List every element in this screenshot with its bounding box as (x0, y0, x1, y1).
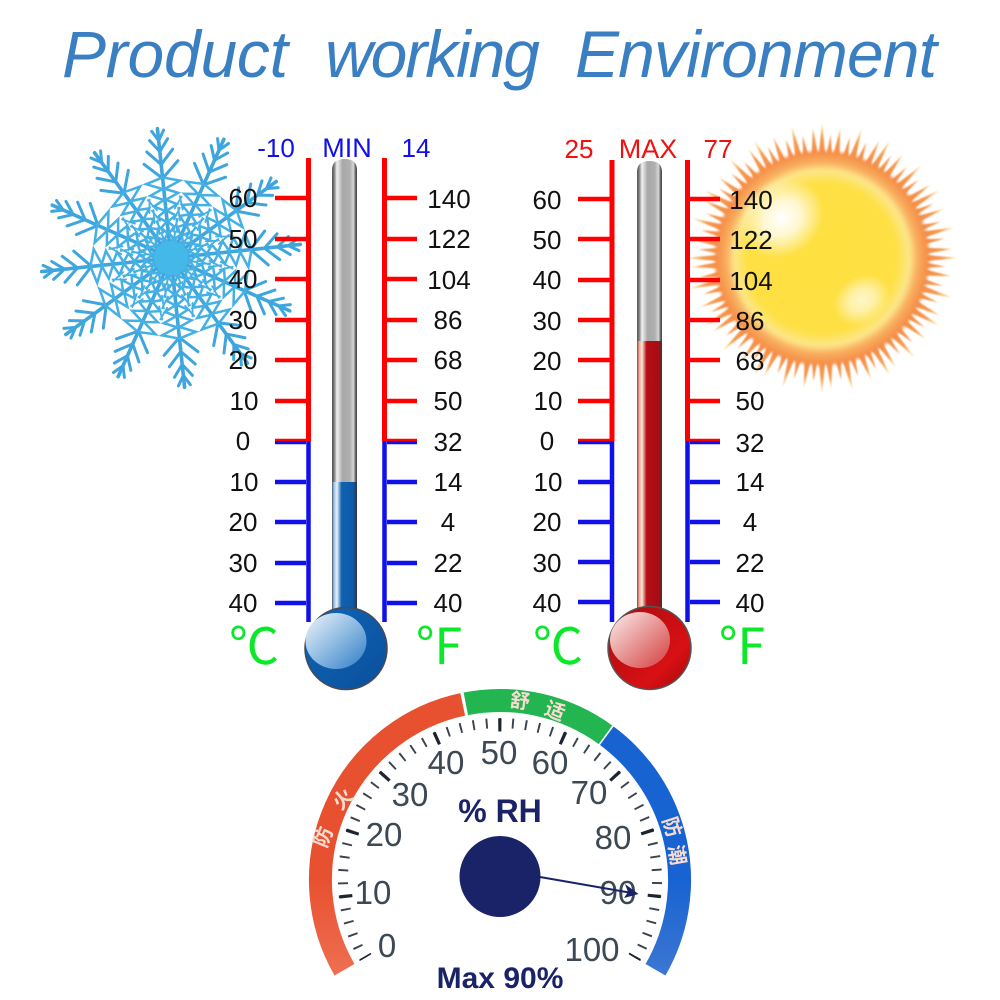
min celsius numbers: 30 (229, 548, 257, 578)
max fahrenheit numbers: 50 (736, 386, 764, 416)
min celsius numbers: 60 (229, 183, 257, 213)
max celsius numbers: 10 (534, 467, 562, 497)
band labels: 防 (657, 813, 690, 841)
max header values (565, 134, 732, 164)
max fahrenheit numbers (729, 185, 773, 618)
max celsius numbers: 20 (533, 346, 561, 376)
min celsius numbers: 30 (229, 305, 257, 335)
max celsius numbers: 0 (540, 426, 554, 456)
max header values: MAX (619, 134, 677, 164)
max bulb (608, 606, 691, 690)
max scale blue section (578, 441, 720, 622)
min fahrenheit numbers: 122 (427, 224, 471, 254)
gauge unit label: % RH (458, 793, 542, 829)
min header values: 14 (402, 133, 430, 163)
min celsius numbers: 40 (229, 264, 257, 294)
icon: snowflake (28, 115, 314, 401)
max fahrenheit numbers: 86 (736, 306, 764, 336)
max celsius numbers: 20 (533, 507, 561, 537)
min bulb (305, 608, 387, 690)
band labels: 适 (541, 692, 570, 727)
gauge scale numbers: 60 (532, 744, 568, 781)
gauge scale numbers: 10 (355, 874, 391, 911)
band labels: 潮 (662, 842, 694, 867)
max fahrenheit numbers: 40 (736, 588, 764, 618)
min fahrenheit numbers: 4 (441, 507, 455, 537)
max fahrenheit numbers: 4 (743, 507, 757, 537)
min scale blue section (275, 441, 417, 622)
min fahrenheit numbers (427, 184, 471, 618)
band labels: 舒 (508, 684, 532, 715)
gauge scale numbers: 100 (564, 931, 620, 968)
humidity gauge (304, 684, 694, 995)
needle hub (460, 836, 540, 917)
title: Environment (575, 17, 940, 91)
gauge scale numbers: 50 (481, 734, 517, 771)
min celsius numbers: 10 (230, 386, 258, 416)
min celsius numbers: 20 (229, 507, 257, 537)
unit: celsius: ℃ (533, 607, 583, 679)
max celsius numbers: 40 (533, 588, 561, 618)
min fahrenheit numbers: 86 (434, 305, 462, 335)
gauge scale numbers: 90 (600, 874, 636, 911)
min celsius numbers: 20 (229, 345, 257, 375)
max celsius numbers: 50 (533, 225, 561, 255)
title (62, 17, 940, 91)
min celsius numbers: 10 (230, 467, 258, 497)
min header values: MIN (322, 133, 372, 163)
gauge band: damp zone (607, 736, 680, 970)
gauge scale numbers (355, 734, 636, 968)
max celsius numbers (533, 185, 562, 618)
thermometer: maximum temperature (533, 134, 773, 690)
max celsius numbers: 30 (533, 548, 561, 578)
max celsius numbers: 30 (533, 306, 561, 336)
min fahrenheit numbers: 104 (427, 265, 471, 295)
max humidity label: Max 90% (437, 962, 563, 995)
min fahrenheit numbers: 14 (434, 467, 462, 497)
max fahrenheit numbers: 104 (729, 266, 773, 296)
min fahrenheit numbers: 68 (434, 345, 462, 375)
gauge band: dry zone (320, 704, 463, 970)
max celsius numbers: 40 (533, 265, 561, 295)
unit: fahrenheit: ℉ (717, 607, 767, 679)
gauge scale numbers: 80 (595, 819, 631, 856)
min fahrenheit numbers: 140 (427, 184, 471, 214)
min celsius numbers (229, 183, 258, 618)
gauge scale numbers: 20 (366, 816, 402, 853)
max fahrenheit numbers: 68 (736, 346, 764, 376)
thermometer: minimum temperature (229, 133, 471, 690)
max fahrenheit numbers: 122 (729, 225, 773, 255)
unit: celsius: ℃ (229, 607, 279, 679)
min blue fluid (332, 482, 357, 617)
icon: sun (674, 110, 970, 406)
gauge scale numbers: 30 (392, 776, 428, 813)
max celsius numbers: 60 (533, 185, 561, 215)
min celsius numbers: 50 (229, 224, 257, 254)
gauge band: comfort zone (466, 701, 606, 735)
max scale red section (612, 160, 688, 441)
unit: fahrenheit: ℉ (414, 607, 464, 679)
band labels: 火 (325, 781, 359, 815)
min header values: -10 (257, 133, 295, 163)
min celsius numbers: 0 (236, 426, 250, 456)
max header values: 77 (704, 134, 732, 164)
gauge scale numbers: 70 (571, 774, 607, 811)
gauge ticks (343, 723, 657, 958)
band labels: 防 (304, 822, 339, 851)
max red fluid (637, 341, 662, 617)
title: working (325, 17, 540, 91)
min fahrenheit numbers: 32 (434, 427, 462, 457)
band labels (304, 684, 694, 867)
needle arrow (540, 877, 638, 898)
min tube (332, 159, 357, 615)
max fahrenheit numbers: 140 (729, 185, 773, 215)
max celsius numbers: 10 (534, 386, 562, 416)
min fahrenheit numbers: 40 (434, 588, 462, 618)
gauge scale numbers: 40 (428, 744, 464, 781)
max tube (637, 161, 662, 615)
min scale red section (308, 158, 384, 441)
max header values: 25 (565, 134, 593, 164)
min fahrenheit numbers: 50 (434, 386, 462, 416)
gauge scale numbers: 0 (378, 927, 396, 964)
min header values (257, 133, 430, 163)
min celsius numbers: 40 (229, 588, 257, 618)
max fahrenheit numbers: 22 (736, 548, 764, 578)
max fahrenheit numbers: 14 (736, 467, 764, 497)
min fahrenheit numbers: 22 (434, 548, 462, 578)
max fahrenheit numbers: 32 (736, 428, 764, 458)
title: Product (62, 17, 291, 91)
